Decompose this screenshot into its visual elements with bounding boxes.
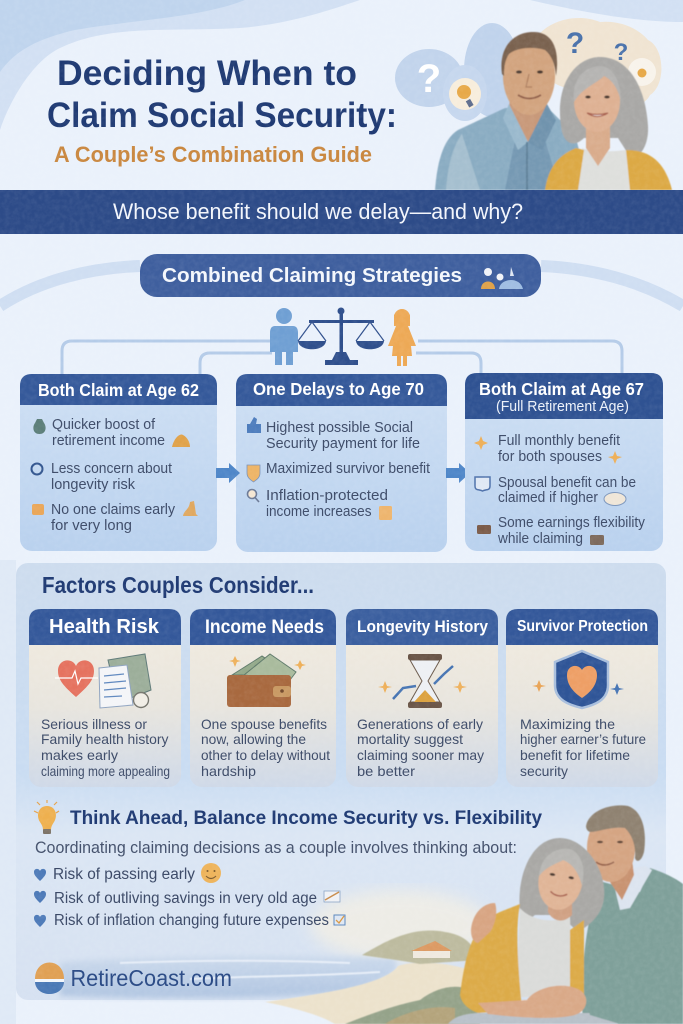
- text: spousal benefit: claimed if higher: [498, 490, 598, 506]
- text: survivor protection: benefit for lifetime: [520, 747, 630, 763]
- icon: checklist: [334, 915, 345, 925]
- icon: sparkle: [608, 451, 622, 464]
- text: survivor protection: Maximizing the: [520, 716, 615, 732]
- title: Claim Social Security:: [47, 96, 397, 135]
- text: survivor protection: security: [520, 763, 568, 779]
- text: maximized survivor: Maximized survivor benefit: [266, 461, 430, 477]
- text: inflation protected: income increases: [266, 504, 372, 520]
- title: [47, 54, 397, 135]
- text: some earnings: [497, 515, 646, 547]
- text: no one claims: [51, 502, 176, 534]
- icon: coins pile: [172, 435, 190, 447]
- icon: man figure: [270, 308, 298, 365]
- card: both claim at age 67: [465, 373, 663, 551]
- text: less concern: Less concern about: [51, 461, 172, 477]
- icon: money bag: [33, 419, 46, 434]
- icon: ring flowers: [604, 492, 626, 506]
- text: less concern: [51, 461, 172, 493]
- card: one delays to age 70: One Delays to Age 70: [253, 379, 424, 399]
- text: highest possible: [266, 420, 420, 452]
- text: health risk: [41, 716, 170, 779]
- text: longevity history: claiming sooner may: [357, 747, 484, 763]
- text: longevity history: be better: [357, 763, 415, 779]
- icon: question mark large: ?: [417, 57, 441, 101]
- text: health risk: claiming more appealing: [41, 763, 170, 779]
- icon: woman figure: [388, 309, 416, 366]
- heading: factors couples consider: Factors Couples Consider...: [42, 572, 314, 598]
- thought bubbles: [395, 18, 661, 121]
- list: risks: Risk of passing early: [53, 866, 195, 883]
- arrow: card 2 to card 3: [446, 463, 470, 483]
- icon: lightbulb heading: [34, 800, 59, 834]
- icon: people group: [481, 267, 523, 289]
- icon: stopwatch: [32, 464, 42, 474]
- icon: heart shield: [247, 465, 260, 482]
- text: spousal benefit: Spousal benefit can be: [498, 475, 636, 491]
- text: inflation protected: Inflation-protected: [266, 488, 388, 504]
- text: full monthly: Full monthly benefit: [498, 433, 620, 449]
- card: survivor protection: [506, 609, 658, 787]
- icon: smiley: [201, 863, 221, 883]
- text: income needs: other to delay without: [201, 747, 330, 763]
- text: full monthly: for both spouses: [498, 449, 602, 465]
- text: quicker boost: Quicker boost of: [52, 417, 156, 433]
- icon: heart with documents: [55, 654, 151, 708]
- card: income needs: [190, 609, 336, 787]
- card: one delays to age 70: [236, 374, 447, 552]
- icon: question mark small: ?: [614, 39, 628, 66]
- icon: magnifying glass: [248, 490, 259, 502]
- text: longevity history: Generations of early: [357, 716, 483, 732]
- icon: scales of justice: [298, 308, 384, 365]
- text: survivor protection: [520, 716, 646, 779]
- card: longevity history: Longevity History: [357, 617, 488, 636]
- list: risks: [34, 863, 345, 929]
- text: health risk: Serious illness or: [41, 716, 147, 732]
- text: income needs: now, allowing the: [201, 731, 306, 747]
- icon: hourglass with rising arrow: [378, 654, 467, 708]
- icon: lightbulb left: [449, 78, 481, 110]
- section pill: combined claiming strategies: [140, 254, 541, 297]
- text: spousal benefit: [498, 475, 636, 506]
- text: no one claims: No one claims early: [51, 502, 176, 518]
- portrait: couple top: [435, 32, 672, 190]
- card: survivor protection: Survivor Protection: [517, 618, 648, 635]
- card: health risk: Health Risk: [49, 616, 160, 638]
- text: quicker boost: retirement income: [52, 433, 165, 449]
- text: survivor protection: higher earner’s future: [520, 731, 646, 747]
- icon: shield with heart: [532, 651, 624, 708]
- logo: retirecoast: [35, 962, 232, 994]
- scene: beach: [60, 890, 490, 1024]
- icon: lightbulb right: [628, 58, 656, 86]
- card: income needs: Income Needs: [205, 617, 324, 638]
- icon: heart bullet 1: [34, 869, 46, 881]
- icon: gift box: [32, 504, 44, 515]
- list: risks: Risk of inflation changing future expenses: [54, 912, 329, 929]
- card: both claim at age 67: (Full Retirement Age): [496, 399, 629, 415]
- banner: [0, 190, 683, 234]
- icon: heart bullet 3: [34, 915, 46, 927]
- text: income needs: One spouse benefits: [201, 716, 327, 732]
- icon: heart bullet 2: [34, 891, 46, 903]
- icon: suitcase: [590, 535, 604, 545]
- card: health risk: [29, 609, 181, 787]
- icon: clipboard: [379, 506, 392, 520]
- panel: factors and think ahead: [16, 563, 666, 1000]
- icon: question mark blue: ?: [566, 27, 584, 60]
- banner: Whose benefit should we delay—and why?: [113, 199, 523, 224]
- text: highest possible: Security payment for life: [266, 436, 420, 452]
- text: income needs: hardship: [201, 763, 256, 779]
- card: longevity history: [346, 609, 498, 787]
- icon: chart: [324, 891, 340, 902]
- heading: think ahead: Think Ahead, Balance Income Security vs. Flexibility: [70, 807, 542, 829]
- portrait: couple bottom: [448, 805, 683, 1024]
- card: both claim at age 62: Both Claim at Age 62: [38, 380, 199, 400]
- text: no one claims: for very long: [51, 518, 132, 534]
- arrow: card 1 to card 2: [216, 463, 240, 483]
- icon: briefcase: [477, 525, 491, 534]
- text: some earnings: Some earnings flexibility: [498, 515, 646, 531]
- text: full monthly: [498, 433, 620, 465]
- icon: sparkles: [474, 436, 488, 450]
- card: both claim at age 67: Both Claim at Age 67: [479, 379, 644, 399]
- subtitle: A Couple’s Combination Guide: [54, 142, 372, 167]
- logo: retirecoast: RetireCoast.com: [70, 965, 232, 991]
- text: quicker boost: [52, 417, 165, 449]
- icon: hand and coin: [183, 501, 198, 516]
- text: highest possible: Highest possible Social: [266, 420, 413, 436]
- title: Deciding When to: [57, 54, 357, 93]
- card: both claim at age 62: [20, 374, 217, 551]
- text: some earnings: while claiming: [497, 531, 583, 547]
- icon: shield: [475, 477, 490, 491]
- icon: wallet with cash: [227, 654, 306, 707]
- list: risks: Risk of outliving savings in very old age: [54, 890, 317, 907]
- text: inflation protected: [266, 488, 388, 520]
- icon: thumbs up: [247, 417, 261, 433]
- icon: sun and wave: [35, 962, 64, 994]
- section pill: combined claiming strategies: Combined Claiming Strategies: [162, 265, 462, 287]
- text: longevity history: [357, 716, 484, 779]
- text: health risk: Family health history: [41, 731, 168, 747]
- text: less concern: longevity risk: [51, 477, 136, 493]
- text: health risk: makes early: [41, 747, 118, 763]
- text: longevity history: mortality suggest: [357, 731, 463, 747]
- connector lines: [62, 341, 622, 374]
- text: income needs: [201, 716, 330, 779]
- text: coordinating: Coordinating claiming decisions as a couple involves thinking about:: [35, 839, 517, 857]
